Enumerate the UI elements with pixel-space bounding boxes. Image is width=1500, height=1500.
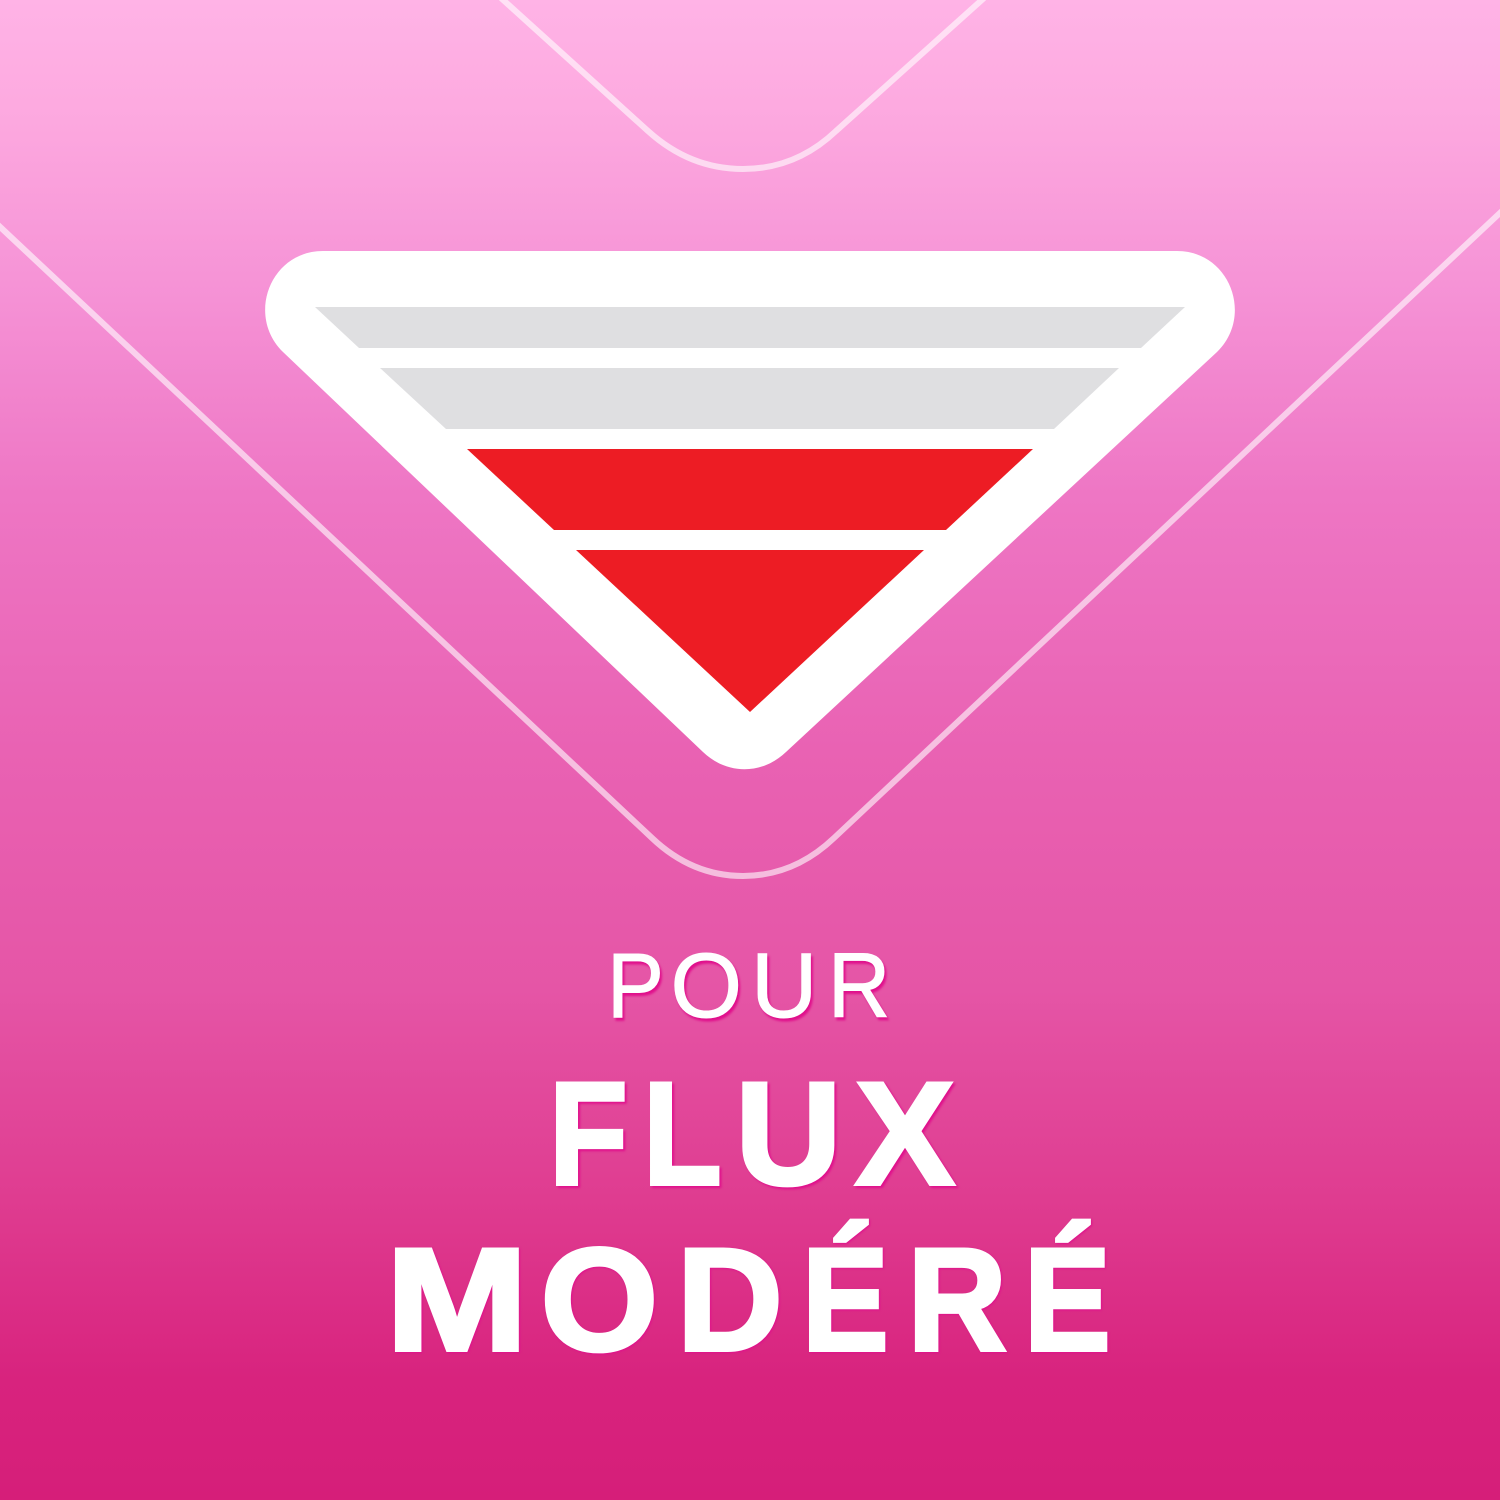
heading: flux: L	[643, 1052, 722, 1215]
heading: flux: F	[549, 1052, 628, 1215]
heading: modéré: R	[908, 1218, 1007, 1381]
inactive level 2	[380, 368, 1119, 429]
heading: flux: X	[856, 1052, 954, 1215]
icon white badge	[265, 251, 1235, 769]
active level 4	[576, 550, 924, 712]
heading: pour: P	[607, 935, 664, 1037]
heading: flux: U	[736, 1052, 841, 1215]
heading: pour: O	[670, 935, 742, 1037]
heading: pour: R	[828, 935, 890, 1037]
heading: modéré: M	[386, 1218, 528, 1381]
heading: modéré: É	[802, 1218, 889, 1381]
icon: absorbency triangle	[265, 251, 1235, 769]
inactive level 1	[315, 307, 1185, 348]
heading: modéré: D	[677, 1218, 783, 1381]
decorative large chevron outline	[0, 211, 1500, 876]
decorative top chevron outline	[501, 0, 984, 169]
heading: modéré: O	[541, 1218, 658, 1381]
active level 3	[467, 449, 1033, 530]
heading: modéré: É	[1024, 1218, 1111, 1381]
heading: pour: U	[751, 935, 817, 1037]
